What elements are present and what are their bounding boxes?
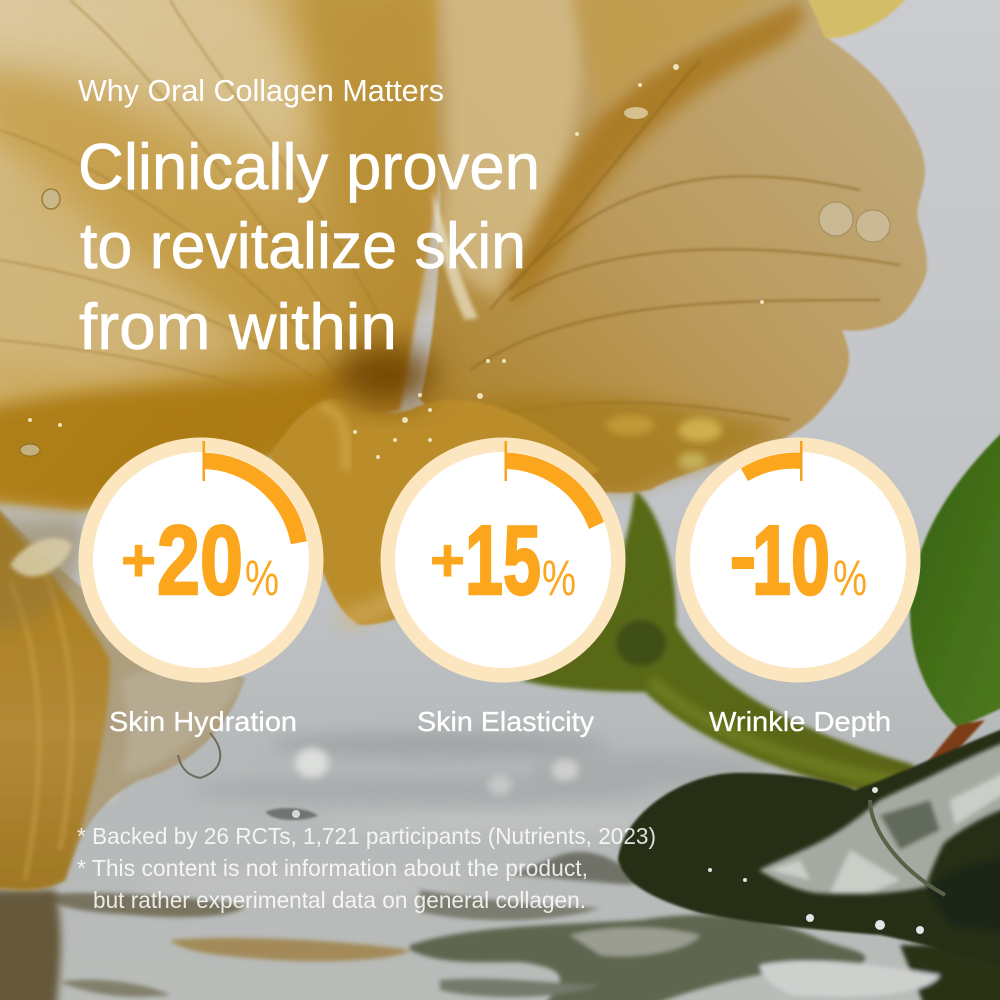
value: [121, 505, 279, 615]
gauge ring: [380, 438, 626, 682]
illustration: water droplets: [20, 64, 890, 778]
stat: wrinkle depth -10%: [676, 438, 920, 737]
value: 15: [465, 505, 541, 615]
illustration: main right petal: [400, 0, 927, 493]
value: 10: [752, 505, 830, 615]
footnotes: [77, 823, 656, 913]
value: +: [121, 527, 156, 594]
label: Skin Elasticity: [417, 706, 594, 737]
value: 20: [157, 505, 243, 615]
label: Wrinkle Depth: [709, 706, 891, 737]
illustration: right green leaf: [910, 415, 1000, 775]
value: -: [729, 505, 757, 607]
title: from within: [79, 290, 397, 363]
illustration: stem: [520, 490, 915, 797]
value: %: [245, 550, 279, 606]
footnotes: * This content is not information about the product,: [77, 855, 588, 881]
title: to revitalize skin: [80, 209, 526, 282]
value: %: [833, 550, 867, 606]
illustration: main left petal: [0, 0, 445, 510]
label: Skin Hydration: [109, 706, 297, 737]
stat: skin elasticity +15%: [380, 438, 626, 737]
footnotes: but rather experimental data on general collagen.: [93, 887, 586, 913]
value: +: [430, 527, 465, 594]
gauge ring: [78, 438, 324, 682]
subheading: Why Oral Collagen Matters: [78, 74, 444, 108]
stat: skin hydration +20%: [78, 438, 324, 737]
value: %: [542, 550, 576, 606]
gauge ring: [676, 438, 920, 682]
footnotes: * Backed by 26 RCTs, 1,721 participants (Nutrients, 2023): [77, 823, 656, 849]
title: Clinically proven: [78, 130, 540, 203]
title: [78, 130, 540, 363]
illustration: lower floating leaf: [618, 722, 1000, 970]
illustration: flower throat and tube: [270, 345, 600, 625]
illustration: lower left petal: [0, 490, 245, 890]
